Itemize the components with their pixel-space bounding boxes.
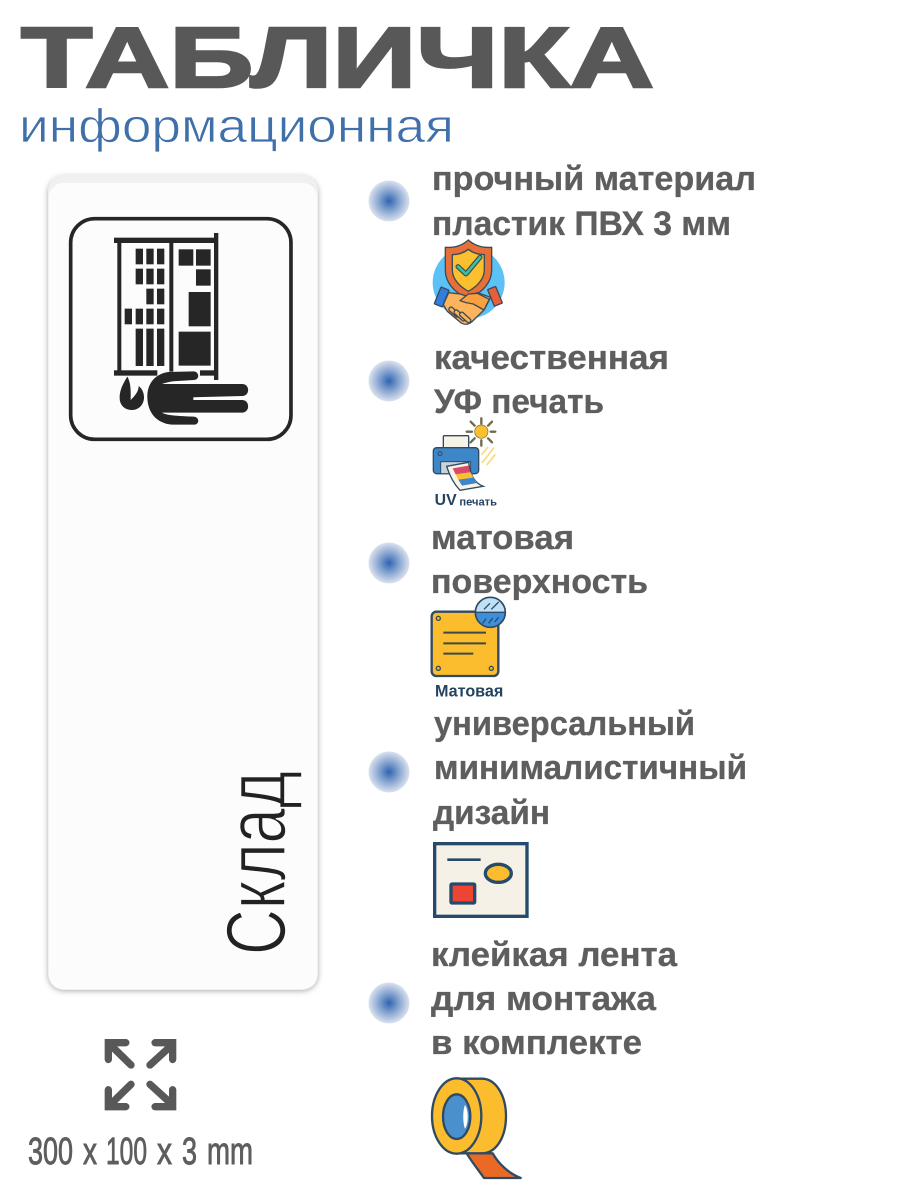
- icon: resize arrows: [105, 1039, 176, 1110]
- icon: UV printer: [433, 418, 497, 509]
- text: UV print: качественная: [434, 339, 669, 377]
- dimensions label: mm: [207, 1131, 253, 1173]
- icon: matte plate: [432, 597, 505, 701]
- bullet 2: [368, 360, 410, 402]
- panel: sign plate: [48, 175, 318, 991]
- text: mounting tape: клейкая лента: [431, 936, 678, 974]
- feature: matte surface: [368, 519, 648, 701]
- feature: mounting tape: [368, 936, 678, 1178]
- text: UV print: [434, 339, 669, 421]
- dimensions label: 3: [182, 1131, 197, 1173]
- feature: durable material: [368, 160, 756, 324]
- text: UV print: УФ печать: [434, 383, 604, 421]
- dimensions label: 100: [106, 1131, 147, 1173]
- text: mounting tape: для монтажа: [431, 980, 657, 1018]
- dimensions label: x: [157, 1131, 172, 1173]
- text: matte surface: матовая: [431, 519, 574, 557]
- text: universal design: минималистичный: [434, 749, 747, 787]
- text: mounting tape: [431, 936, 678, 1062]
- icon: shield and handshake: [433, 240, 505, 324]
- bullet 1: [368, 180, 410, 222]
- dimensions label: [28, 1131, 253, 1173]
- feature: UV print: [368, 339, 669, 509]
- feature: universal design: [368, 705, 747, 916]
- icon: UV printer: UV: [435, 492, 457, 509]
- text: durable material: прочный материал: [432, 160, 756, 198]
- text: universal design: [433, 705, 747, 832]
- icon: UV printer: печать: [459, 497, 497, 509]
- text: universal design: дизайн: [433, 794, 550, 832]
- sign label: Склад: [209, 771, 303, 955]
- bullet 3: [368, 542, 410, 584]
- text: durable material: [432, 160, 756, 243]
- dimensions label: 300: [28, 1131, 73, 1173]
- title: ТАБЛИЧКА: [21, 11, 654, 106]
- text: durable material: пластик ПВХ 3 мм: [432, 205, 731, 243]
- text: universal design: универсальный: [434, 705, 695, 743]
- bullet 5: [368, 982, 410, 1024]
- icon: matte plate: Матовая: [435, 682, 503, 701]
- subtitle: информационная: [19, 99, 454, 152]
- text: mounting tape: в комплекте: [431, 1024, 642, 1062]
- icon: warehouse shelf falling on person: [71, 219, 291, 439]
- icon: tape roll: [432, 1078, 521, 1178]
- text: matte surface: [431, 519, 648, 601]
- icon: minimal layout: [435, 844, 527, 916]
- dimensions label: x: [83, 1131, 97, 1173]
- bullet 4: [368, 752, 410, 792]
- text: matte surface: поверхность: [431, 563, 648, 601]
